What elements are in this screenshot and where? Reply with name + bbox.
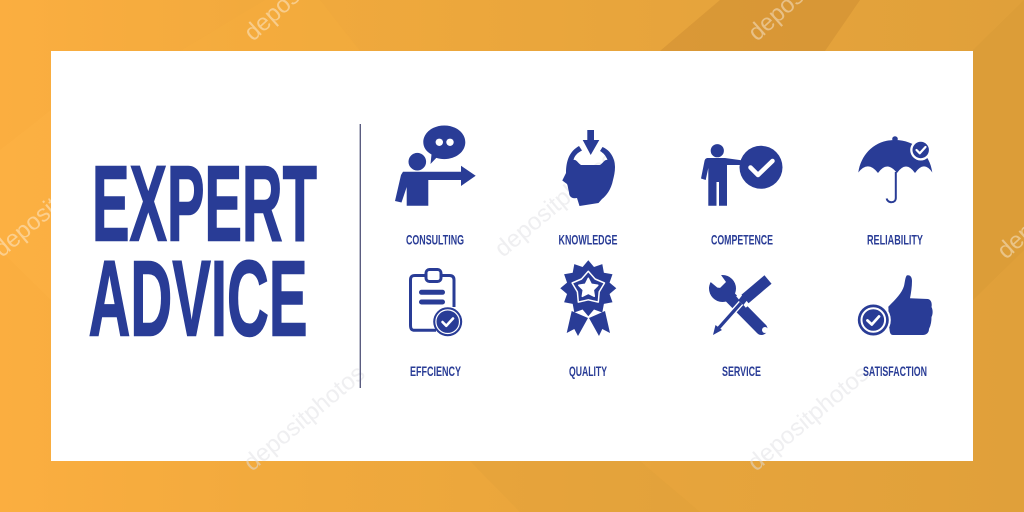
label: quality: QUALITY xyxy=(569,363,607,379)
title: EXPERT ADVICE: EXPERT xyxy=(92,142,317,264)
icon: competence xyxy=(701,144,782,206)
watermark text: depositphotos xyxy=(743,360,874,477)
title: EXPERT ADVICE xyxy=(88,142,317,358)
divider xyxy=(360,124,361,388)
label: satisfaction: SATISFACTION xyxy=(863,363,927,379)
label: consulting: CONSULTING xyxy=(406,231,464,247)
icon: satisfaction thumbs up xyxy=(856,275,933,338)
label: knowledge: KNOWLEDGE xyxy=(558,231,618,247)
label: competence: COMPETENCE xyxy=(711,231,773,247)
icon: knowledge xyxy=(562,130,615,206)
icon: service tools xyxy=(707,268,768,335)
white panel xyxy=(51,51,973,461)
label: reliability: RELIABILITY xyxy=(867,231,923,247)
icon: reliability umbrella xyxy=(858,136,932,202)
icon: consulting xyxy=(395,126,476,206)
label: efficiency: EFFCIENCY xyxy=(410,363,461,379)
watermark text: depositphotos xyxy=(239,360,370,477)
title: EXPERT ADVICE: ADVICE xyxy=(88,238,308,358)
label: service: SERVICE xyxy=(722,363,761,379)
watermark text: depositphotos xyxy=(490,146,621,263)
icon: efficiency clipboard xyxy=(410,270,462,336)
icon: quality rosette xyxy=(560,260,616,336)
